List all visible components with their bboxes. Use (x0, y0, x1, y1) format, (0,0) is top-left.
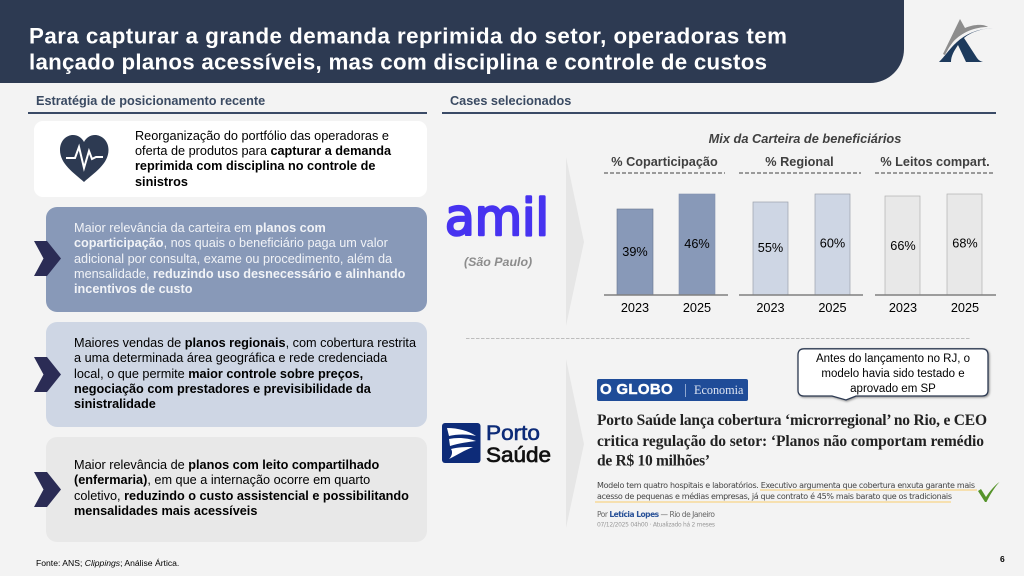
news byline: 07/12/2025 04h00 · Atualizado há 2 meses (597, 522, 715, 528)
section heading: estratégia (28, 94, 427, 114)
news headline: Porto Saúde lança cobertura ‘microrregional’ no Rio, e CEO (597, 412, 987, 429)
intro text: sinistros (135, 175, 188, 189)
regionais text: local, o que permite maior controle sobre preços, (74, 367, 363, 381)
amil logo: amil (445, 189, 549, 248)
coparticipação text: adicional por consulta, exame ou procedimento, além da (74, 252, 392, 266)
banner separator (685, 384, 686, 397)
section heading: cases (442, 94, 996, 114)
coparticipação text: coparticipação, nos quais o beneficiário paga um valor (74, 236, 388, 250)
leito text: Maior relevância de planos com leito compartilhado (74, 458, 379, 472)
amil region label: (São Paulo) (464, 255, 532, 269)
group: leitos compartilhados: 2025 (951, 301, 979, 315)
news summary: Modelo tem quatro hospitais e laboratórios. Executivo argumenta que cobertura enxuta garante mais (597, 480, 975, 490)
callout text: Antes do lançamento no RJ, o (816, 352, 970, 364)
group: regional: 60% (820, 236, 845, 250)
panel: regionais (46, 322, 427, 427)
panel: intro card (34, 121, 427, 197)
group: coparticipação: 2025 (683, 301, 711, 315)
regionais text: negociação com prestadores e previsibilidade da (74, 382, 371, 396)
news headline: critica regulação do setor: ‘Planos não comportam remédio (597, 433, 984, 450)
title text: Para capturar a grande demanda reprimida do setor, operadoras tem (29, 24, 787, 48)
group: regional: % Regional (765, 155, 834, 169)
title text: lançado planos acessíveis, mas com disciplina e controle de custos (29, 50, 767, 74)
group: coparticipação: 2023 (621, 301, 649, 315)
group: coparticipação: % Coparticipação (611, 155, 718, 169)
group: leitos compartilhados: 2023 (889, 301, 917, 315)
o globo banner (597, 379, 748, 401)
group: regional (739, 155, 863, 315)
group: regional: 2025 (818, 301, 847, 315)
company logo (939, 19, 992, 62)
group: leitos compartilhados: 68% (952, 236, 978, 250)
group: regional: 2023 (756, 301, 785, 315)
section heading: estratégia: Estratégia de posicionamento recente (36, 94, 265, 108)
group: leitos compartilhados: % Leitos compart. (880, 155, 990, 169)
coparticipação text: Maior relevância da carteira em planos com (74, 221, 326, 235)
group: coparticipação: 39% (622, 245, 648, 259)
callout (797, 348, 991, 403)
intro text: Reorganização do portfólio das operadoras e (135, 128, 389, 142)
arrow: regionais (34, 357, 61, 392)
leito text (74, 458, 409, 518)
chart title: Mix da Carteira de beneficiários (709, 131, 901, 146)
group: leitos compartilhados (875, 155, 996, 315)
callout text (816, 352, 970, 395)
group: coparticipação (604, 155, 728, 315)
intro text: oferta de produtos para capturar a demanda (135, 144, 391, 158)
regionais text: Maiores vendas de planos regionais, com cobertura restrita (74, 336, 416, 350)
regionais text: a uma determinada área geográfica e rede credenciada (74, 351, 387, 365)
intro text (135, 128, 392, 189)
economia label: Economia (694, 383, 743, 397)
callout text: aprovado em SP (850, 383, 936, 395)
panel: coparticipação (46, 207, 427, 312)
group: regional: 55% (758, 241, 783, 255)
leito text: (enfermaria), em que a internação ocorre em quarto (74, 473, 370, 487)
page number: 6 (1000, 554, 1005, 564)
porto saúde logo: Porto (486, 422, 540, 445)
intro text: reprimida com disciplina no controle de (135, 159, 375, 173)
leito text: mensalidades mais acessíveis (74, 504, 257, 518)
group: coparticipação: 46% (684, 237, 710, 251)
news summary: acesso de pequenas e médias empresas, já que contrato é 45% mais barato que os tradicionais (597, 491, 952, 501)
leito text: coletivo, reduzindo o custo assistencial e possibilitando (74, 489, 409, 503)
coparticipação text (74, 221, 405, 296)
arrow: leito (34, 472, 61, 507)
regionais text: sinistralidade (74, 397, 156, 411)
o globo wordmark: O GLOBO (600, 381, 673, 398)
porto saúde logo: Saúde (486, 444, 551, 467)
news byline: Por Letícia Lopes — Rio de Janeiro (597, 510, 715, 519)
title banner (0, 0, 904, 83)
news headline: de R$ 10 milhões’ (597, 452, 710, 470)
section heading: cases: Cases selecionados (450, 94, 571, 108)
panel: leito compartilhado (46, 437, 427, 542)
group: leitos compartilhados: 66% (890, 239, 916, 253)
title text (29, 24, 787, 74)
regionais text (74, 336, 416, 411)
icon: heart with pulse (60, 135, 108, 182)
coparticipação text: mensalidade, reduzindo uso desnecessário e alinhando (74, 267, 405, 281)
coparticipação text: incentivos de custo (74, 282, 192, 296)
callout text: modelo havia sido testado e (821, 368, 965, 380)
arrow: coparticipação (34, 241, 61, 276)
source note: Fonte: ANS; Clippings; Análise Ártica. (36, 558, 179, 568)
